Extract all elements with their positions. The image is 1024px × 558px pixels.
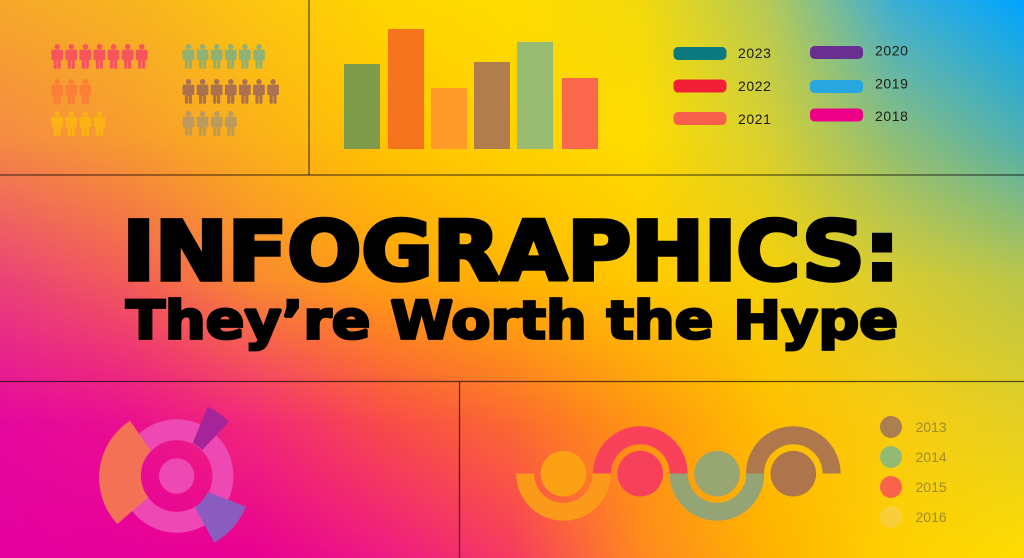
title <box>122 204 900 351</box>
people row: green <box>183 44 265 69</box>
bar chart legend <box>674 42 909 127</box>
pictogram chart <box>51 44 279 136</box>
bar chart legend: 2022 <box>738 78 772 94</box>
bar chart legend: 2023 <box>738 45 772 61</box>
people row: tan <box>183 111 237 136</box>
bar chart legend: 2018 <box>875 108 909 124</box>
subtitle: They’re Worth the Hype <box>126 290 898 351</box>
wave chart legend: 2016 <box>916 509 947 525</box>
radial donut chart <box>99 407 246 543</box>
bar chart legend: 2020 <box>875 42 909 58</box>
bar chart legend: 2021 <box>738 111 772 127</box>
wave chart legend: 2013 <box>916 419 947 435</box>
people row: orange <box>51 79 91 104</box>
wave chart <box>516 426 841 521</box>
wave chart legend: 2014 <box>916 449 947 465</box>
people row: yellow <box>51 111 105 136</box>
people row: brown <box>183 79 279 104</box>
bar chart <box>344 29 598 149</box>
wave chart legend <box>880 416 947 528</box>
people row: red <box>51 44 148 69</box>
wave chart legend: 2015 <box>916 479 947 495</box>
bar chart legend: 2019 <box>875 76 909 92</box>
title: INFOGRAPHICS: <box>122 204 900 299</box>
